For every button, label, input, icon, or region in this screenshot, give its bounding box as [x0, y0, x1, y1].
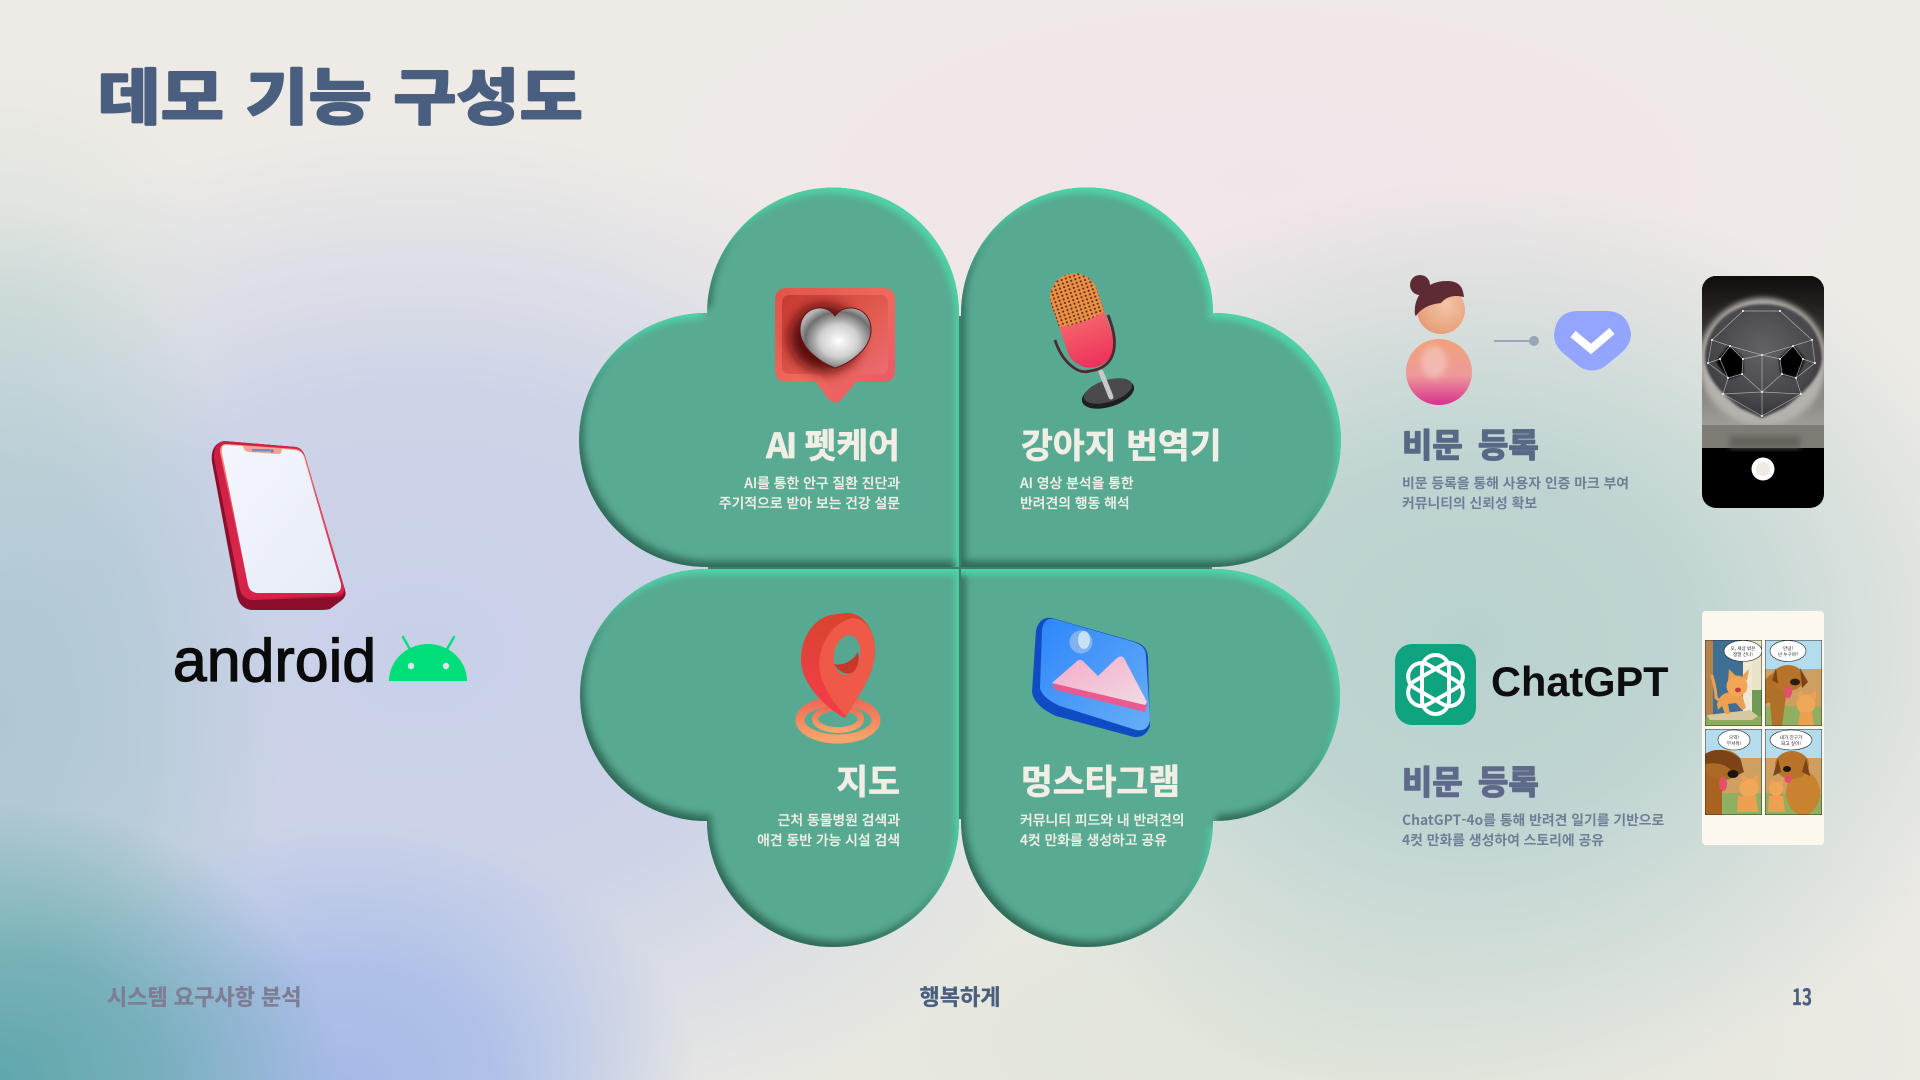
android wordmark: android — [173, 626, 376, 694]
comic panel 1 — [1705, 640, 1762, 726]
icon: photo card — [1032, 618, 1150, 737]
description: 비문 등록을 통해 사용자 인증 마크 부여 — [1402, 472, 1629, 492]
icon: verified person — [1406, 275, 1472, 405]
description: AI 영상 분석을 통한 — [1020, 472, 1134, 492]
panel: android device — [173, 441, 467, 694]
heading: 강아지 번역기 — [1021, 418, 1222, 468]
icon: heart badge — [775, 288, 895, 402]
comic panel 1: 정말 신나! — [1733, 651, 1753, 658]
panel: four-leaf clover — [579, 187, 1341, 947]
title: 데모 기능 구성도 — [98, 51, 583, 137]
comic panel 2: 안녕! — [1783, 645, 1793, 652]
footer: page number: 13 — [1792, 980, 1812, 1012]
ChatGPT wordmark: ChatGPT — [1491, 658, 1669, 705]
description line 2: 4컷 만화를 생성하고 공유 — [1020, 829, 1167, 849]
heading: 지도 — [836, 754, 900, 804]
description line 2: 주기적으로 받아 보는 건강 설문 — [719, 492, 900, 512]
comic panel 4: 되고 싶어! — [1781, 740, 1801, 747]
comic panel 1: 오, 세상 밖은 — [1730, 645, 1756, 652]
description: 커뮤니티 피드와 내 반려견의 — [1020, 809, 1184, 829]
panel: map leaf — [580, 569, 959, 947]
panel: dog translator leaf — [961, 187, 1341, 567]
slide canvas — [100, 66, 1824, 1008]
description line 2: 4컷 만화를 생성하여 스토리에 공유 — [1402, 829, 1604, 849]
comic panel 3: 으악! — [1729, 734, 1739, 741]
description line 2: 커뮤니티의 신뢰성 확보 — [1402, 492, 1537, 512]
icon: location pin — [800, 613, 876, 739]
panel: AI pet care leaf — [579, 188, 959, 567]
comic panel 3: 무서워! — [1727, 740, 1742, 747]
icon: ChatGPT logo — [1395, 644, 1476, 725]
description line 2: 반려견의 행동 해석 — [1020, 492, 1130, 512]
icon: android head — [389, 637, 467, 681]
phone: nose scan — [1699, 276, 1827, 508]
dog nose photo — [1699, 276, 1827, 426]
description: ChatGPT-4o를 통해 반려견 일기를 기반으로 — [1402, 809, 1665, 829]
panel: mungstagram leaf — [961, 569, 1340, 947]
connector line — [1494, 336, 1539, 346]
heading: 멍스타그램 — [1021, 754, 1180, 804]
icon: check badge — [1554, 311, 1631, 370]
heading: 비문 등록 — [1402, 756, 1539, 804]
comic panel 4 — [1765, 729, 1822, 815]
footer: team name: 행복하게 — [920, 980, 1000, 1012]
mesh overlay — [1708, 311, 1815, 416]
panel: nose print registration — [1402, 275, 1827, 512]
shutter button — [1752, 458, 1774, 480]
comic panel 3 — [1704, 729, 1762, 815]
blurred band — [1702, 425, 1824, 448]
description: AI를 통한 안구 질환 진단과 — [744, 472, 900, 492]
comic strip — [1702, 611, 1824, 845]
panel: ChatGPT comic — [1395, 611, 1824, 849]
heading: 비문 등록 — [1402, 419, 1539, 467]
icon: microphone — [1044, 267, 1138, 414]
icon: red smartphone — [212, 441, 346, 610]
description: 근처 동물병원 검색과 — [778, 809, 900, 829]
comic panel 4: 내가 친구가 — [1780, 734, 1803, 741]
footer: section name: 시스템 요구사항 분석 — [107, 980, 301, 1012]
comic panel 2: 넌 누구야? — [1778, 651, 1798, 658]
heading: AI 펫케어 — [765, 418, 900, 468]
comic panel 2 — [1765, 640, 1822, 726]
description line 2: 애견 동반 가능 시설 검색 — [757, 829, 900, 849]
